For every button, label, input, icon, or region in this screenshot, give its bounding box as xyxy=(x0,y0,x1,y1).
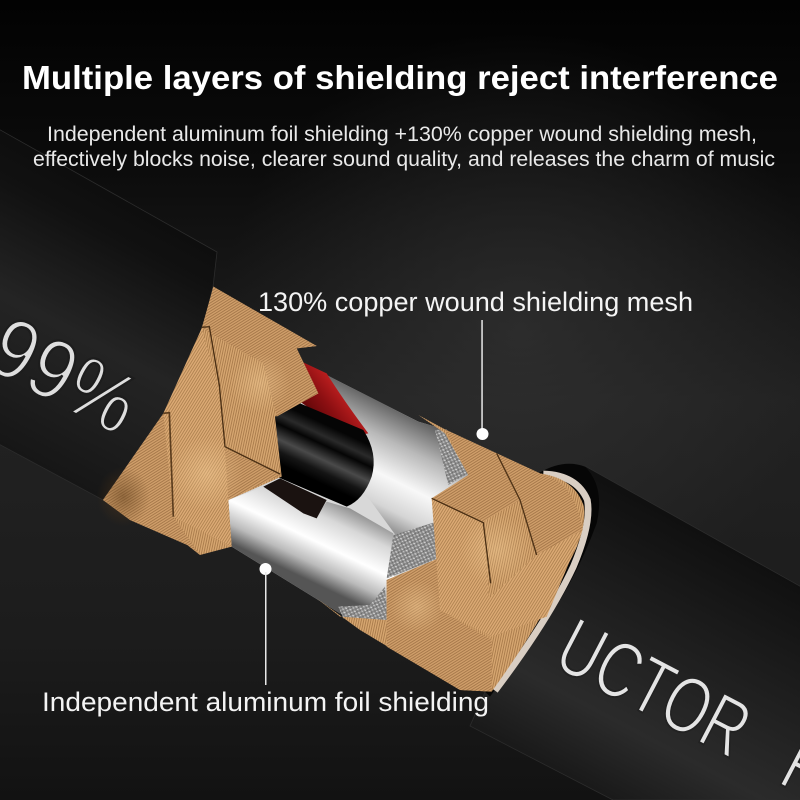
right cable jacket xyxy=(470,466,800,800)
rough foil edges xyxy=(338,429,468,621)
description: effectively blocks noise, clearer sound quality, and releases the charm of music xyxy=(33,148,775,171)
callout: aluminum foil shielding: Independent aluminum foil shielding xyxy=(42,687,489,717)
aluminium foil: upper part xyxy=(303,363,468,537)
copper braid: left section xyxy=(97,287,318,555)
printed text: UCTOR F: UCTOR xyxy=(543,601,765,774)
aluminium foil base xyxy=(228,363,463,620)
aluminium foil: lower part xyxy=(228,487,397,620)
copper braid: right section xyxy=(317,415,584,692)
left cable jacket xyxy=(0,127,217,500)
black insulated conductor xyxy=(273,403,374,507)
dark shadow under conductor xyxy=(263,478,327,518)
black ring behind braid xyxy=(477,464,599,697)
red insulated conductor xyxy=(293,362,368,437)
title: Multiple layers of shielding reject interference xyxy=(22,59,778,96)
cutaway cable core xyxy=(97,287,599,697)
callout: copper wound shielding mesh: 130% copper wound shielding mesh xyxy=(258,287,693,317)
callout: copper wound shielding mesh xyxy=(258,287,693,440)
description xyxy=(33,123,775,171)
pale inner sleeve ring xyxy=(495,474,588,691)
description: Independent aluminum foil shielding +130% copper wound shielding mesh, xyxy=(47,123,757,146)
callout: aluminum foil shielding xyxy=(42,563,489,717)
